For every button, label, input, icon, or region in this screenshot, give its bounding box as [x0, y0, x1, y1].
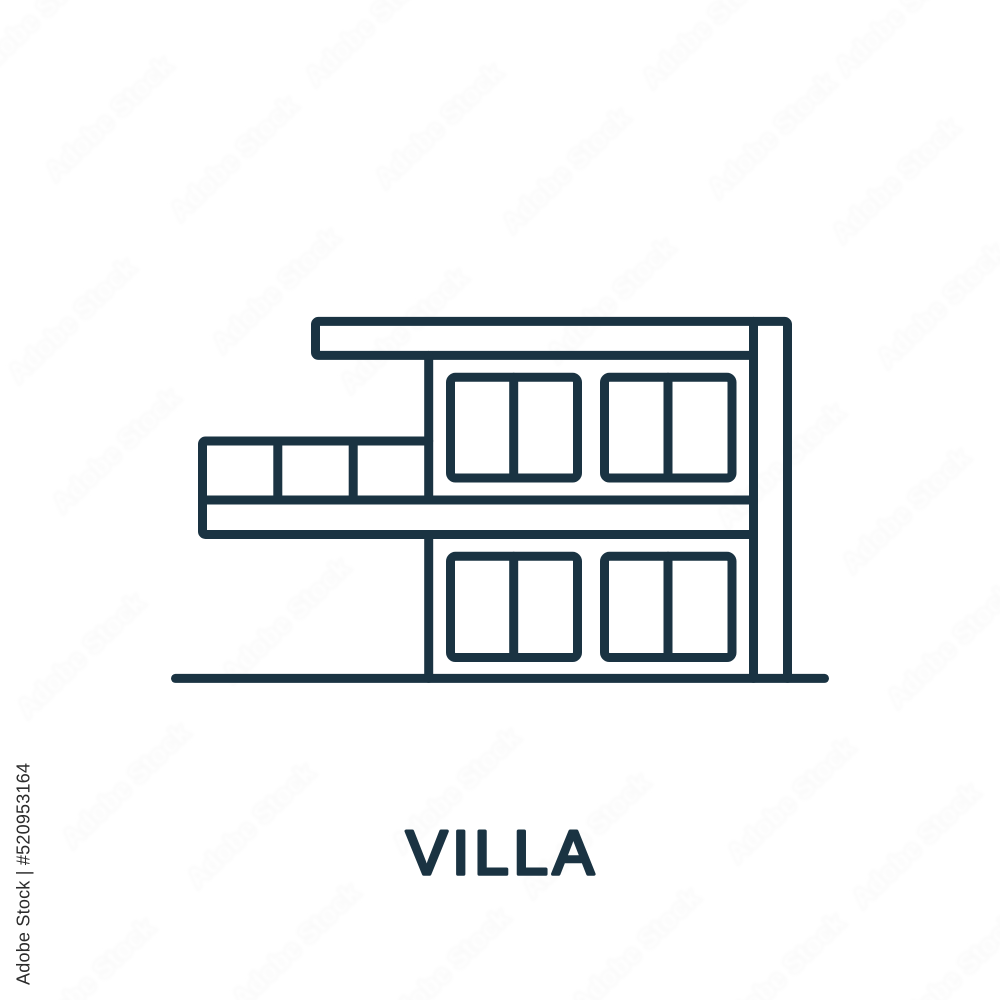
watermark pattern: Adobe Stock: [386, 722, 526, 859]
window: upper left: [450, 377, 578, 478]
window: upper right: [604, 377, 732, 478]
left wall: [424, 355, 433, 678]
watermark pattern: Adobe Stock: [46, 382, 186, 519]
watermark pattern: Adobe Stock: [836, 442, 976, 579]
watermark pattern: Adobe Stock: [56, 717, 196, 854]
watermark pattern: Adobe Stock: [39, 50, 179, 187]
watermark pattern: Adobe Stock: [216, 552, 356, 689]
watermark pattern: Adobe Stock: [369, 57, 509, 194]
roof slab and right column: [316, 321, 788, 678]
watermark pattern: Adobe Stock: [181, 757, 321, 894]
watermark pattern: Adobe Stock: [206, 222, 346, 359]
watermark pattern: Adobe Stock: [541, 232, 681, 369]
stock image id caption: Adobe Stock | #520953164: [14, 763, 34, 985]
watermark pattern: Adobe Stock: [711, 397, 851, 534]
watermark pattern: Adobe Stock: [496, 102, 636, 239]
title: VILLA: VILLA: [406, 819, 595, 888]
watermark pattern: Adobe Stock: [826, 112, 966, 249]
ground line: [176, 674, 824, 683]
balcony with railing: [202, 441, 754, 534]
watermark pattern: Adobe Stock: [846, 777, 986, 914]
watermark pattern: Adobe Stock: [334, 262, 474, 399]
watermark pattern: Adobe Stock: [2, 252, 142, 389]
watermark pattern: Adobe Stock: [702, 67, 842, 204]
window: lower right: [604, 556, 732, 658]
watermark pattern: Adobe Stock: [164, 90, 304, 227]
watermark pattern: Adobe Stock: [11, 587, 151, 724]
watermark pattern: Adobe Stock: [516, 767, 656, 904]
watermark pattern: Adobe Stock: [721, 732, 861, 869]
icon: villa building: [176, 321, 824, 678]
window: lower left: [450, 556, 578, 658]
column inner edge: [749, 321, 758, 678]
